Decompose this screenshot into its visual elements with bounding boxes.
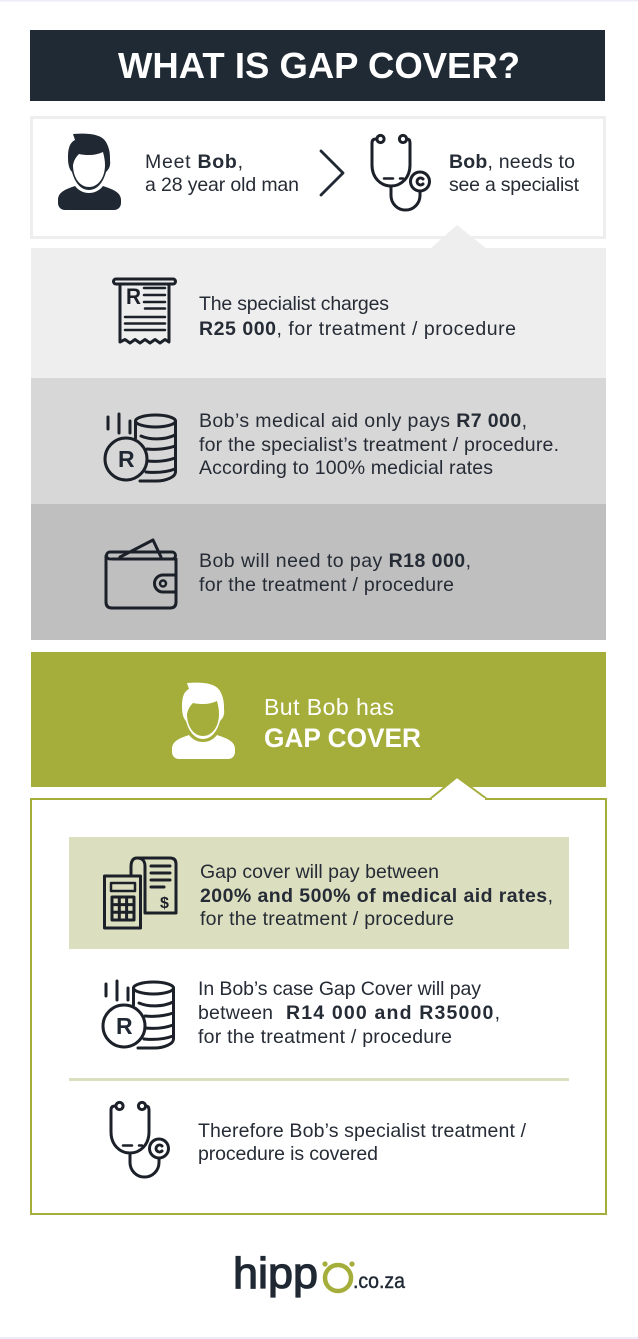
icon: stethoscope [111,1102,168,1177]
row: gap cover pays [69,837,569,949]
text: medical aid pays: for the specialist’s treatment / procedure. [199,434,559,456]
text: bob pays: for the treatment / procedure [199,574,454,596]
panel: gap cover details [31,777,606,1214]
text: bob's case: In Bob’s case Gap Cover will pay [198,978,481,1000]
text: covered: procedure is covered [198,1143,378,1165]
text: gap cover pays: Gap cover will pay between [200,861,439,883]
icon: coins [103,981,174,1048]
title [30,30,605,101]
text: gap cover heading: But Bob has [264,694,394,720]
text: gap cover pays: for the treatment / procedure [200,908,454,930]
text: bob's case: for the treatment / procedure [198,1026,452,1048]
panel: but bob has gap cover [31,652,606,787]
text: meet bob [145,151,299,196]
text: specialist charges [199,293,516,340]
band: specialist charges [31,248,606,378]
text: covered [198,1120,527,1165]
text: bob's case: R14 000 and R35000, [286,1002,500,1024]
title: WHAT IS GAP COVER? [118,45,520,86]
logo: .co.za [353,1270,405,1293]
icon: coins: R [116,1013,133,1039]
panel: meet bob [32,118,604,238]
logo [233,1249,405,1298]
pointer [430,225,487,249]
icon: coins: R [118,446,135,472]
row: covered [111,1102,527,1177]
row: bob's case [103,978,500,1048]
icon: calculator and bill: $ [160,895,169,912]
text: bob's case: between [198,1002,273,1024]
icon: calculator and bill [104,858,176,928]
icon: wallet [106,540,176,608]
text: specialist charges: R25 000, for treatment / procedure [199,318,516,340]
text: specialist charges: The specialist charges [199,293,389,315]
text: needs specialist: see a specialist [449,174,580,196]
pointer [430,777,487,799]
panel: cost bands [31,225,606,640]
text: medical aid pays [199,410,559,479]
band: bob pays [31,504,606,640]
icon: person [58,134,121,210]
text: gap cover pays: 200% and 500% of medical aid rates, [200,885,553,907]
text: covered: Therefore Bob’s specialist treatment / [198,1120,527,1142]
icon: person white [172,683,235,759]
text: needs specialist: Bob, needs to [449,151,575,173]
band: medical aid pays [31,378,606,504]
text: medical aid pays: According to 100% medicial rates [199,457,493,479]
text: gap cover heading [264,694,421,753]
logo: hipp [233,1249,318,1298]
text: meet bob: a 28 year old man [145,174,299,196]
text: gap cover heading: GAP COVER [264,723,421,753]
text: bob pays [199,550,471,596]
text: medical aid pays: Bob’s medical aid only pays R7 000, [199,410,527,432]
text: meet bob: Meet Bob, [145,151,243,173]
icon: stethoscope [372,135,430,210]
icon: receipt: R [126,284,141,309]
icon: coins [105,414,176,481]
text: bob pays: Bob will need to pay R18 000, [199,550,471,572]
arrow: chevron [321,151,343,195]
text: gap cover pays [200,861,553,930]
text: bob's case [198,978,500,1048]
icon: receipt [114,279,176,343]
text: needs specialist [449,151,580,196]
